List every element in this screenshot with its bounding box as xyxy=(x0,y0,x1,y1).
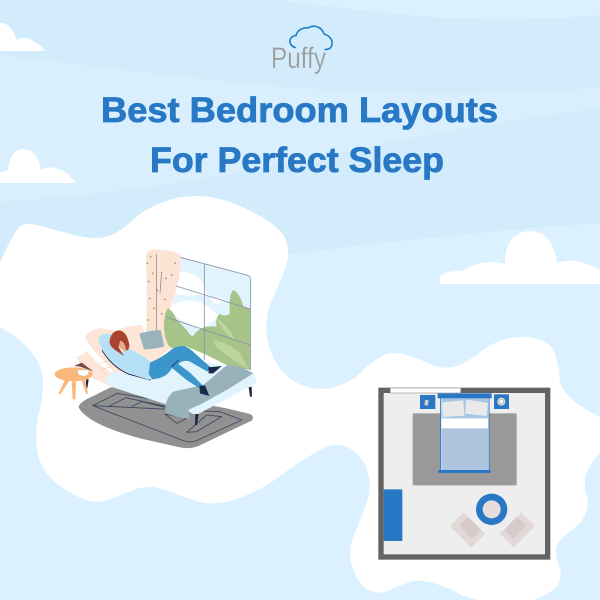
title: Best Bedroom Layouts xyxy=(101,91,498,130)
plant leaves xyxy=(164,257,251,370)
window xyxy=(167,257,251,370)
floor plan xyxy=(381,388,548,557)
bench xyxy=(384,489,402,541)
cup xyxy=(77,370,89,376)
white blob panel xyxy=(0,196,600,600)
headboard pillows xyxy=(77,325,172,384)
headboard xyxy=(438,393,492,398)
window xyxy=(390,388,461,393)
armchair left xyxy=(452,514,483,546)
logo wordmark: Puffy xyxy=(271,42,326,75)
logo: Puffy xyxy=(271,26,332,75)
back shadow line xyxy=(102,350,151,380)
title: For Perfect Sleep xyxy=(150,141,444,180)
cloud: middle left xyxy=(0,149,76,183)
hair xyxy=(109,331,129,356)
bed legs xyxy=(86,379,252,425)
curtain xyxy=(146,249,180,353)
side table xyxy=(55,363,93,399)
bed mattress xyxy=(105,362,256,414)
nightstand left xyxy=(420,395,435,409)
rug xyxy=(79,387,253,448)
area rug xyxy=(413,413,517,485)
shirt xyxy=(98,334,151,380)
blanket xyxy=(165,365,253,419)
cloud: top left xyxy=(0,23,45,51)
trousers xyxy=(149,346,211,387)
shoes xyxy=(199,366,222,396)
round table xyxy=(476,494,507,525)
illustration: woman resting on bed by window xyxy=(55,249,256,448)
small square pillow xyxy=(139,330,164,349)
cloud: right xyxy=(440,231,600,284)
nightstand right xyxy=(494,394,509,409)
footboard xyxy=(438,470,491,473)
woman xyxy=(98,331,222,396)
bed xyxy=(438,393,492,473)
title xyxy=(101,91,498,180)
armchair right xyxy=(502,514,533,546)
pillows xyxy=(442,400,464,417)
logo cloud icon xyxy=(290,26,332,50)
face xyxy=(118,338,128,352)
room xyxy=(381,390,548,557)
